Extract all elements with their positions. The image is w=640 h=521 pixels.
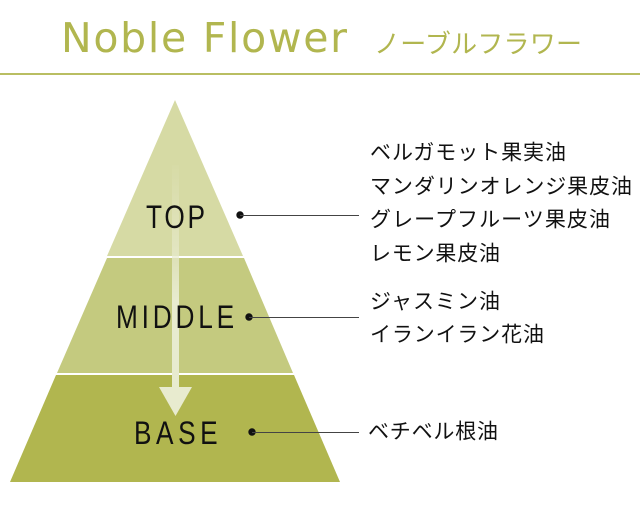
ingredients: base notes: ベチベル根油	[368, 420, 498, 444]
label: TOP: TOP	[146, 201, 205, 236]
title: Noble Flower	[61, 14, 347, 62]
title: ノーブルフラワー	[374, 29, 582, 59]
title rule	[0, 73, 640, 75]
arrow: top to base	[159, 165, 192, 416]
pyramid	[10, 100, 340, 482]
pyramid tier: top	[107, 100, 243, 256]
ingredients: top notes	[370, 142, 632, 266]
connector: base	[248, 428, 359, 436]
pyramid tier: middle	[57, 258, 293, 373]
title	[61, 14, 582, 62]
pyramid tier: base	[10, 375, 340, 482]
ingredients: middle notes: イランイラン花油	[370, 324, 544, 346]
label: MIDDLE: MIDDLE	[116, 301, 234, 336]
connector: top	[236, 211, 359, 219]
ingredients: top notes: レモン果皮油	[370, 242, 500, 266]
ingredients: top notes: ベルガモット果実油	[370, 142, 566, 164]
ingredients: middle notes: ジャスミン油	[370, 290, 500, 314]
connector: middle	[245, 313, 359, 321]
ingredients: top notes: マンダリンオレンジ果皮油	[370, 176, 632, 198]
ingredients: middle notes	[370, 290, 544, 346]
label: BASE: BASE	[134, 417, 218, 452]
ingredients: top notes: グレープフルーツ果皮油	[370, 208, 610, 232]
